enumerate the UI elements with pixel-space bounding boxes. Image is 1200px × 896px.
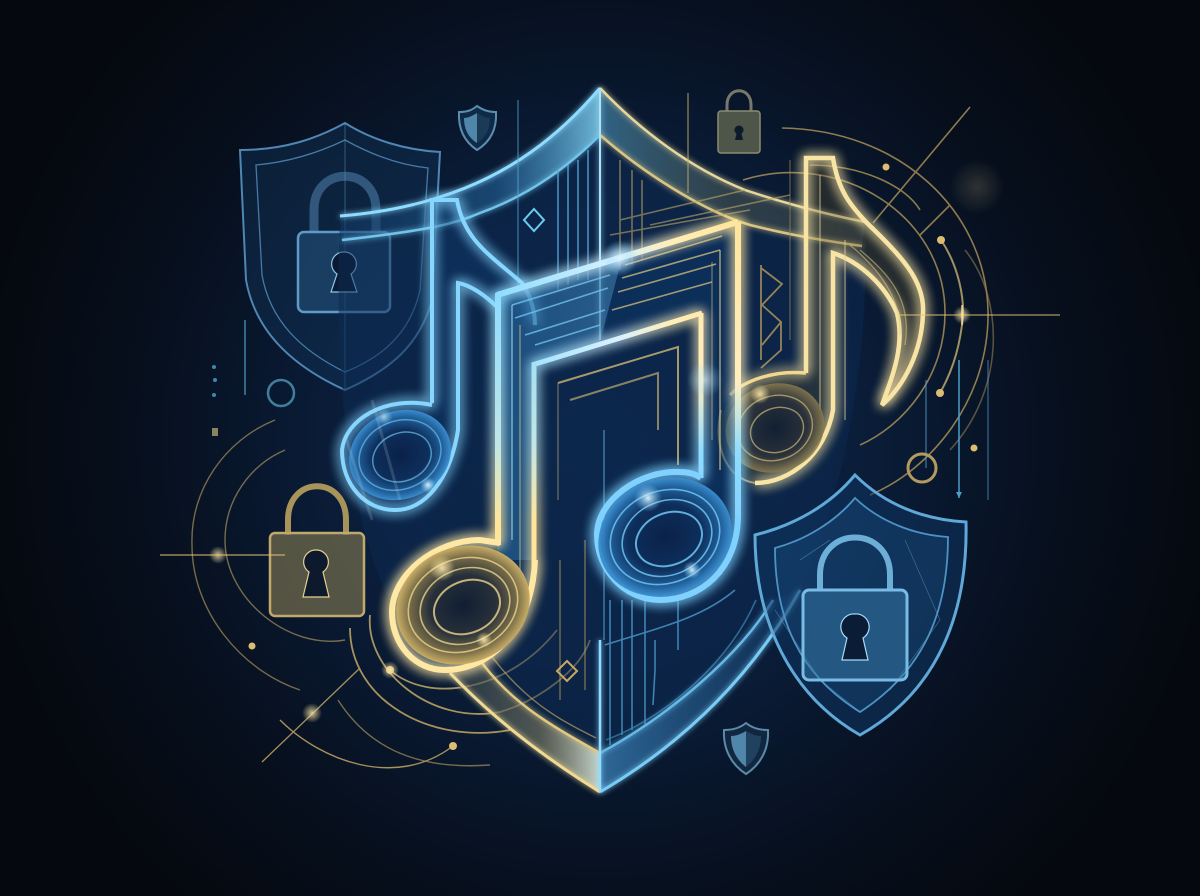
inner lines, top bbox=[518, 100, 588, 290]
light glints bbox=[602, 240, 638, 276]
note outlines bbox=[392, 222, 738, 670]
blue thin lines, right bbox=[926, 360, 988, 500]
bottom bands bbox=[450, 650, 600, 792]
icon: blue padlock bbox=[298, 176, 390, 312]
icon: small diamonds bbox=[524, 209, 577, 681]
decorative arcs: gold, right bbox=[743, 107, 993, 495]
decorative arcs: gold, lower left bbox=[192, 420, 590, 768]
icon: gold padlock bbox=[270, 486, 364, 616]
note head: gold small bbox=[713, 370, 837, 486]
top bands bbox=[340, 88, 600, 240]
icon: blue padlock bbox=[803, 538, 907, 680]
flag inner strokes bbox=[850, 245, 906, 345]
icon: small padlock, top bbox=[718, 91, 760, 153]
panel: left background shield bbox=[240, 123, 440, 390]
panel: right shield with padlock bbox=[755, 475, 966, 735]
music note head: gold bbox=[378, 526, 548, 684]
icon: sparkles bbox=[160, 159, 1060, 723]
note head: blue small bbox=[335, 395, 465, 515]
icon: small shield, bottom bbox=[724, 723, 768, 774]
music note head: blue bbox=[580, 458, 750, 616]
zigzag mark bbox=[761, 265, 782, 368]
icon: blue music note, left bbox=[335, 200, 535, 520]
icon: large double music note bbox=[378, 222, 750, 684]
icon: small shield, top bbox=[459, 106, 496, 150]
reflection bbox=[497, 258, 622, 560]
beam inner lines bbox=[512, 236, 722, 580]
nested window lines bbox=[558, 347, 678, 640]
panel: central shield bbox=[339, 88, 866, 792]
icon: small rings and dots bbox=[212, 164, 978, 750]
shield body bbox=[339, 88, 866, 792]
icon: gold music note, right bbox=[713, 158, 923, 486]
shield edges bbox=[340, 88, 865, 792]
note body fill bbox=[392, 222, 738, 670]
fine lattice lines bbox=[775, 540, 940, 712]
inner lines, bottom bbox=[605, 590, 756, 745]
